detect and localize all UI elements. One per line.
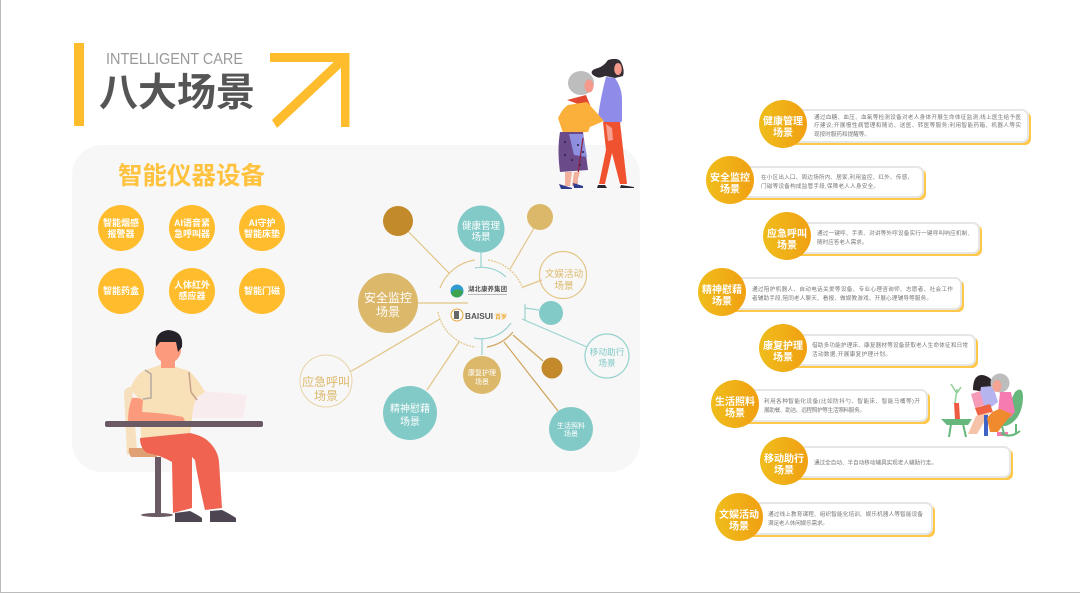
device: AI voice call (169, 205, 215, 251)
logo: group (450, 284, 507, 298)
heading: smart devices: 智能仪器设备 (118, 162, 266, 190)
illustration: man at table (124, 330, 247, 522)
card: safety monitoring: 场景 (720, 182, 740, 196)
device: AI mattress: AI守护 (248, 217, 276, 228)
device: smoke alarm: 智能烟感 (103, 217, 139, 228)
node: emergency call: 应急呼叫 (302, 374, 350, 389)
device: AI voice call: AI语音紧 (174, 217, 210, 228)
node: emergency call (300, 355, 352, 407)
heading: English subtitle: INTELLIGENT CARE (106, 51, 243, 68)
card: daily care: 利用各种智能化设备(比如防抖勺、智能床、智能马桶等)开 (764, 397, 920, 405)
node: daily care (549, 407, 593, 451)
title accent bar (74, 43, 84, 126)
device: pill box: 智能药盒 (103, 285, 139, 296)
card: rehabilitation: 场景 (773, 350, 793, 364)
card: mobility: 通过全自动、半自动移动辅具实现老人辅助行走。 (814, 458, 937, 466)
device: AI mattress: 智能床垫 (244, 228, 280, 239)
node: mobility (585, 334, 629, 378)
card: safety monitoring: 在小区出入口、周边场所内、居家,利用监控、红外、传感、 (761, 173, 913, 181)
device: smoke alarm: 报警器 (107, 228, 135, 239)
card: daily care: 场景 (725, 406, 745, 420)
device: infrared sensor (169, 268, 215, 314)
card: rehabilitation: 借助多功能护理床、康复器材等设备获取老人生命体征和日常 (812, 341, 968, 349)
card: entertainment (715, 493, 935, 541)
node: daily care: 生活照料 (557, 421, 585, 430)
node: safety monitoring (358, 273, 418, 333)
device: pill box (98, 268, 144, 314)
illustration: young woman helping elderly woman (558, 59, 634, 189)
card: health management: 疗建议;开展慢性病管理和随访、送医、转医等服务;利用智能药箱、机器人等实 (814, 121, 1021, 129)
card: mobility: 移动助行 (764, 452, 804, 465)
card: rehabilitation: 活动数据,开展康复护理计划。 (812, 350, 891, 358)
cards: eight scene descriptions (698, 100, 1031, 541)
card: spiritual comfort: 者辅助手段,陪同老人聊天、看报、做娱教游戏、开展心理辅导等服务。 (752, 294, 932, 302)
device: infrared sensor: 感应器 (178, 290, 206, 301)
card: mobility: 场景 (774, 464, 794, 476)
node: rehabilitation (463, 356, 501, 394)
logo: Baisui: 百岁 (495, 313, 507, 321)
card: rehabilitation: 康复护理 (763, 339, 803, 352)
card: entertainment: 满足老人休闲娱乐需求。 (768, 519, 828, 527)
card: health management: 健康管理 (763, 114, 803, 128)
node: spiritual comfort: 场景 (400, 415, 420, 428)
node: small teal dot (539, 301, 563, 325)
device: door sensor (239, 268, 285, 314)
node: spiritual comfort: 精神慰藉 (390, 402, 430, 415)
card: spiritual comfort: 精神慰藉 (702, 283, 742, 296)
card: emergency call: 随时应答老人需求。 (817, 238, 867, 246)
card: daily care: 生活照料 (715, 395, 755, 408)
device: AI mattress (239, 205, 285, 251)
node: health management: 场景 (471, 232, 491, 243)
card: entertainment: 通过线上教育课程、组织智能化培训、娱乐机器人等智能设备 (768, 510, 923, 518)
chart: scene network diagram (300, 204, 629, 451)
card: safety monitoring: 门磁等设备构成监管手段,保障老人人身安全。 (761, 182, 879, 190)
node: entertainment: 文娱活动 (545, 268, 584, 280)
card: emergency call (763, 212, 982, 260)
logo: Baisui (451, 309, 507, 321)
node: health management (458, 206, 504, 252)
card: entertainment: 场景 (729, 520, 749, 532)
card: rehabilitation (759, 324, 978, 372)
card: safety monitoring: 安全监控 (710, 171, 750, 184)
node: entertainment: 场景 (554, 281, 574, 292)
heading: main title: 八大场景 (99, 72, 255, 115)
card: mobility (760, 437, 1013, 485)
device: door sensor: 智能门磁 (244, 285, 280, 296)
icon: arrow up-right (270, 53, 350, 128)
card: emergency call: 场景 (777, 238, 797, 252)
card: spiritual comfort: 场景 (712, 294, 732, 308)
illustration: young woman reading with elderly woman (941, 374, 1023, 437)
node: safety monitoring: 场景 (376, 305, 400, 319)
card: emergency call: 应急呼叫 (767, 227, 807, 240)
device: smoke alarm (98, 205, 144, 251)
card: emergency call: 通过一键呼、手表、对讲等外呼设备实行一键呼叫响应机制, (817, 229, 969, 237)
node: dark gold dot (383, 206, 413, 236)
card: spiritual comfort: 通过陪护机器人、自动电话关爱等设备、专业心理咨询师、志愿者、社会工作 (752, 285, 953, 293)
node: mobility: 移动助行 (590, 346, 625, 357)
node: mobility: 场景 (598, 358, 616, 368)
logo: group: 湖北康养集团 (468, 284, 507, 293)
logo: Baisui: BAISUI (465, 312, 493, 321)
device circles (98, 205, 285, 314)
card: daily care (711, 380, 930, 428)
device: infrared sensor: 人体红外 (174, 279, 210, 290)
node: entertainment (540, 252, 586, 298)
card: daily care: 展助餐、助洁、远程照护等生活照料服务。 (764, 406, 865, 414)
card: spiritual comfort (698, 268, 964, 316)
node: rehabilitation: 康复护理 (468, 368, 496, 377)
card: health management: 通过血糖、血压、血氧等检测设备对老人身体开展生命体征监测,线上医生给予医 (814, 113, 1021, 121)
card: entertainment: 文娱活动 (719, 508, 759, 521)
node: daily care: 场景 (564, 429, 578, 438)
card: safety monitoring (706, 156, 926, 204)
card: health management (759, 100, 1031, 148)
node: health management: 健康管理 (462, 220, 500, 232)
node: emergency call: 场景 (314, 389, 338, 403)
device: AI voice call: 急呼叫器 (174, 228, 210, 239)
node: spiritual comfort (383, 386, 437, 440)
node: small dark gold dot (542, 358, 562, 378)
card: health management: 现按时服药和提醒等。 (814, 130, 870, 138)
node: light gold dot (527, 204, 553, 230)
node: safety monitoring: 安全监控 (364, 290, 412, 305)
connector lines (350, 221, 587, 411)
card: health management: 场景 (773, 126, 793, 139)
panel: smart devices and scenes background (72, 145, 640, 472)
table top (105, 421, 263, 427)
node: rehabilitation: 场景 (475, 377, 489, 386)
